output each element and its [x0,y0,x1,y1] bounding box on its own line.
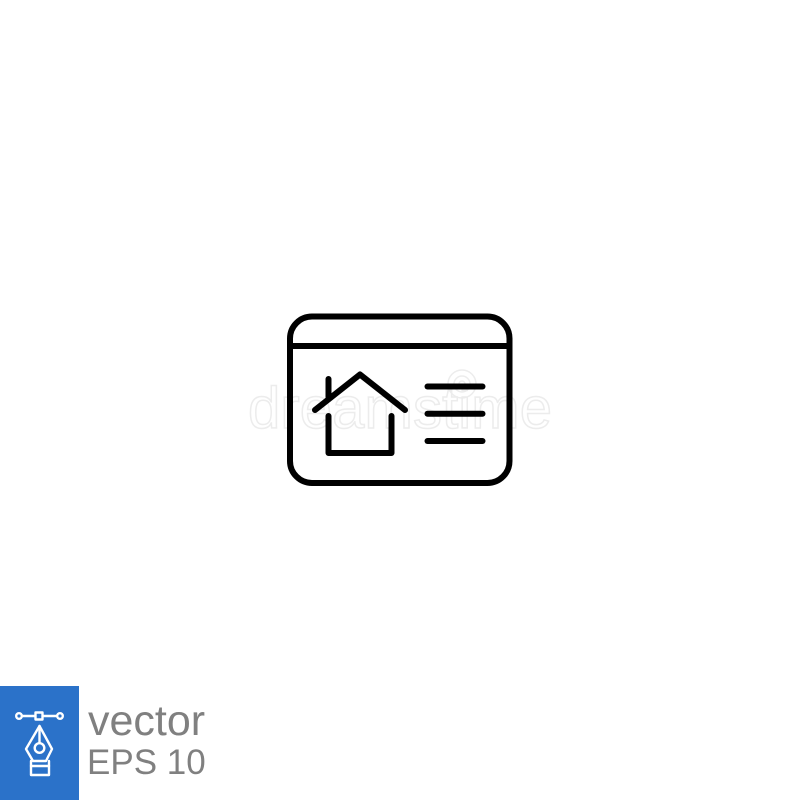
house chimney [326,379,332,397]
watermark text: dreamstime [248,376,552,441]
watermark [248,370,552,441]
bezier handle [16,712,63,720]
text line 1 [428,384,482,390]
label: EPS 10: EPS 10 [87,743,206,782]
pen nib [26,726,52,761]
nib slit and hole [38,726,41,743]
card frame [290,316,510,483]
icon: pen tool [16,712,63,775]
text line 2 [428,411,482,417]
house walls [328,416,392,453]
card header divider [290,343,509,349]
pen grip [31,761,49,775]
text line 3 [428,438,482,444]
watermark logo [448,370,476,398]
badge: vector blue square [0,686,79,800]
icon: house listing card [290,316,510,483]
house roof [315,374,405,410]
label: vector: vector [88,697,205,745]
